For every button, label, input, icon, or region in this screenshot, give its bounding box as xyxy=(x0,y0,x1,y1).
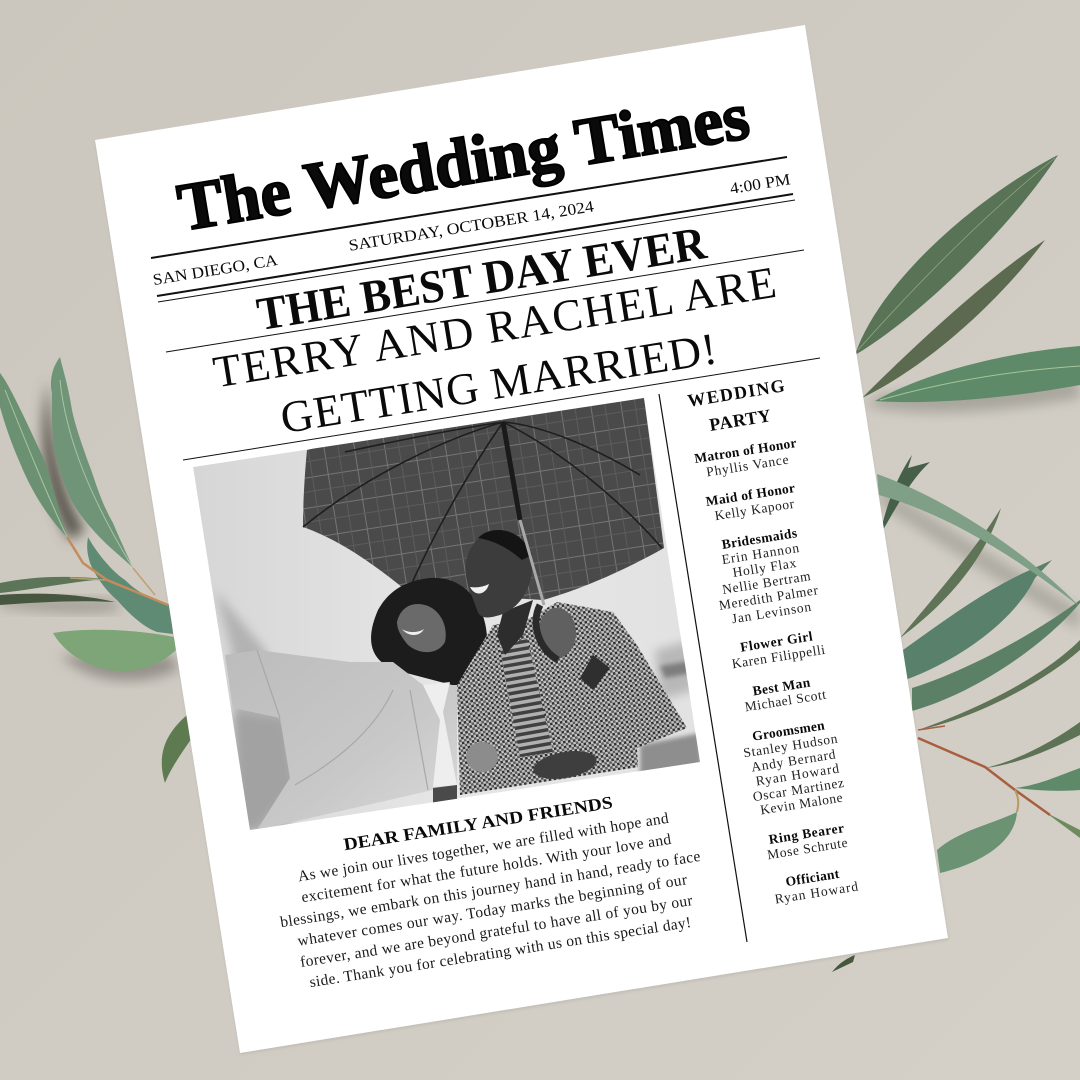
greeting heading: DEAR FAMILY AND FRIENDS xyxy=(342,792,614,854)
wedding party heading xyxy=(686,375,786,435)
wedding party list: Erin Hannon xyxy=(721,540,800,567)
wedding party list: Jan Levinson xyxy=(731,599,812,626)
umbrella canopy xyxy=(303,390,664,600)
dateline: location: SAN DIEGO, CA xyxy=(152,252,279,289)
greeting message: whatever comes our way. Today marks the beginning of our xyxy=(296,871,689,950)
wedding party list: Flower Girl xyxy=(739,628,814,655)
wedding party list: Nellie Bertram xyxy=(721,568,812,597)
paper sheet shadow xyxy=(95,27,949,1055)
wedding party heading: WEDDING xyxy=(686,375,786,411)
leaves: right sprig xyxy=(832,155,1080,972)
wedding party list: Michael Scott xyxy=(744,687,827,714)
wedding party list: Kelly Kapoor xyxy=(714,496,795,523)
umbrella pole xyxy=(503,422,520,520)
woman trousers xyxy=(433,785,457,803)
wedding party list: Ring Bearer xyxy=(768,820,845,847)
woman face xyxy=(397,604,446,652)
woman coat xyxy=(225,650,457,830)
wedding party list: Holly Flax xyxy=(732,555,797,580)
wedding party list: Andy Bernard xyxy=(750,746,837,775)
masthead rules xyxy=(151,157,820,460)
wedding party list: Best Man xyxy=(751,675,812,698)
wedding party list: Bridesmaids xyxy=(721,525,798,552)
wedding party list: Mose Schrute xyxy=(766,835,848,862)
subheadline line 1: TERRY AND RACHEL ARE xyxy=(210,257,779,397)
man neck xyxy=(497,600,533,655)
background plants xyxy=(215,590,702,830)
man smile xyxy=(470,584,489,593)
greeting message: blessings, we embark on this journey hand in hand, ready to face xyxy=(279,848,702,931)
subheadline line 2: GETTING MARRIED! xyxy=(277,323,720,443)
photo: couple under umbrella xyxy=(193,390,702,830)
coat seams xyxy=(257,650,428,790)
woman smile xyxy=(402,629,424,635)
man cuff xyxy=(580,655,610,690)
man lower hand xyxy=(533,751,597,779)
masthead title: The Wedding Times xyxy=(172,77,754,245)
wedding party list: Groomsmen xyxy=(751,717,826,744)
dateline: time: 4:00 PM xyxy=(729,171,792,198)
wedding party list xyxy=(693,435,859,907)
woman blouse xyxy=(423,682,457,787)
greeting message: side. Thank you for celebrating with us on this special day! xyxy=(308,914,692,991)
wedding party list: Kevin Malone xyxy=(759,790,843,817)
wedding party list: Stanley Hudson xyxy=(742,731,839,760)
newspaper paper xyxy=(95,25,948,1053)
dateline: date: SATURDAY, OCTOBER 14, 2024 xyxy=(348,198,595,255)
man jacket xyxy=(457,602,687,795)
man shirt xyxy=(500,638,553,757)
wedding party list: Oscar Martinez xyxy=(752,775,845,804)
wedding party list: Meredith Palmer xyxy=(718,582,819,613)
wedding party list: Officiant xyxy=(784,866,841,889)
umbrella ribs xyxy=(303,422,662,592)
photo background xyxy=(193,398,700,830)
greeting message: As we join our lives together, we are filled with hope and xyxy=(297,810,670,885)
wedding party list: Maid of Honor xyxy=(705,480,796,509)
man raised hand xyxy=(538,608,576,658)
man head xyxy=(465,530,532,617)
wedding party list: Karen Filippelli xyxy=(731,642,826,671)
woman hair xyxy=(371,578,487,686)
man hair xyxy=(478,530,532,560)
column divider xyxy=(659,394,747,942)
umbrella handle xyxy=(536,605,558,660)
wedding party heading: PARTY xyxy=(708,405,772,435)
leaves: left sprig xyxy=(0,357,192,783)
umbrella shaft xyxy=(520,520,544,605)
wedding party list: Phyllis Vance xyxy=(705,452,789,479)
headline: THE BEST DAY EVER xyxy=(253,217,711,341)
woman hand xyxy=(466,742,498,772)
wedding party list: Ryan Howard xyxy=(755,761,840,789)
greeting message: forever, and we are beyond grateful to have all of you by our xyxy=(299,892,694,971)
greeting message xyxy=(279,810,702,991)
wedding party list: Ryan Howard xyxy=(774,879,859,907)
greeting message: excitement for what the future holds. With your love and xyxy=(300,831,673,906)
wedding party list: Matron of Honor xyxy=(693,435,797,466)
